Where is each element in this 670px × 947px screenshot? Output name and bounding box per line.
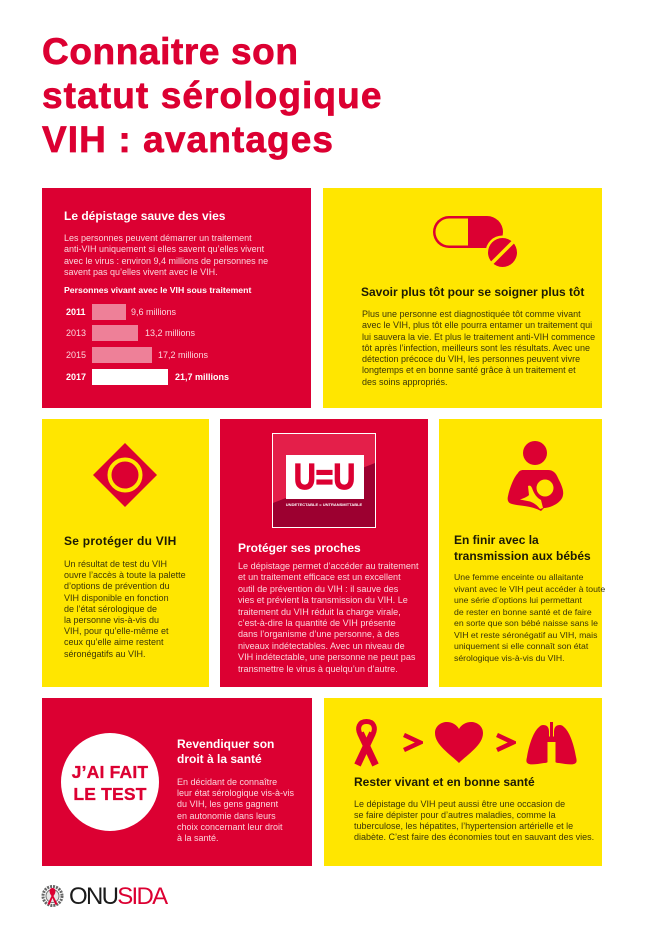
text block: avec le VIH, plus tôt elle pourra entamer un traitement qui: [362, 320, 592, 330]
heading: [454, 533, 591, 563]
text block: se faire dépister pour d’autres maladies, comme la: [354, 810, 556, 820]
icon: UN emblem with ribbon: [42, 885, 64, 907]
panel: en finir avec la transmission aux bébés: [439, 419, 602, 687]
text block: dans l’organisme d’une personne, à des: [238, 629, 399, 639]
text block: Le dépistage permet d’accéder au traitement: [238, 561, 418, 571]
heading: droit à la santé: [177, 752, 262, 766]
text block: [64, 559, 186, 659]
text block: ouvre l’accès à toute la palette: [64, 570, 186, 580]
title: [42, 31, 382, 160]
bar 2013: [66, 325, 195, 341]
title: VIH : avantages: [42, 119, 334, 160]
text block: [64, 233, 268, 277]
icon: heart: [435, 722, 483, 763]
badge: j'ai fait le test: LE TEST: [73, 784, 147, 804]
text block: sérologique vis-à-vis du VIH.: [454, 652, 565, 662]
text block: VIH disponible en fonction: [64, 593, 169, 603]
text block: la personne vis-à-vis du: [64, 615, 159, 625]
text block: tôt après l’infection, meilleurs sont les résultats. Avec une: [362, 343, 590, 353]
text block: outil de prévention du VIH : il sauve des: [238, 584, 398, 594]
heading: transmission aux bébés: [454, 549, 591, 563]
bar 2011: 9,6 millions: [131, 307, 176, 317]
text block: une série d’options lui permettant: [454, 595, 582, 605]
bar 2015: [66, 347, 208, 363]
panel: savoir plus tôt: [323, 188, 602, 408]
text block: des soins appropriés.: [362, 377, 448, 387]
bar 2013: 13,2 millions: [145, 328, 195, 338]
icon: lungs: [526, 722, 577, 764]
text block: de rester en bonne santé et de faire: [454, 606, 592, 616]
text block: Une femme enceinte ou allaitante: [454, 572, 583, 582]
text block: vies et prévient la transmission du VIH. Le: [238, 595, 408, 605]
text block: Un résultat de test du VIH: [64, 559, 167, 569]
text block: détection précoce du VIH, les personnes peuvent vivre: [362, 354, 580, 364]
arrow: greater than: [496, 733, 516, 752]
icon: U=U badge: [272, 433, 376, 528]
title: statut sérologique: [42, 75, 382, 116]
text block: VIH indétectable, une personne ne peut pas: [238, 652, 415, 662]
text block: Le dépistage du VIH peut aussi être une occasion de: [354, 799, 565, 809]
text block: en sorte que son bébé naisse sans le: [454, 618, 598, 628]
text block: savent pas qu’elles vivent avec le VIH.: [64, 267, 218, 277]
text block: ceux qu’elle aime restent: [64, 637, 164, 647]
text block: choix concernant leur droit: [177, 822, 283, 832]
text block: anti-VIH uniquement si elles savent qu’elles vivent: [64, 244, 264, 254]
bar 2015: 2015: [66, 350, 86, 360]
bar 2011: [66, 304, 176, 320]
bar 2017: 21,7 millions: [175, 372, 229, 382]
text block: en autonomie dans leurs: [177, 811, 276, 821]
panel: revendiquer son droit à la santé: [42, 698, 312, 866]
wordmark: ONUSIDA: [69, 883, 166, 910]
panel: le dépistage sauve des vies: [42, 188, 311, 408]
text block: [362, 309, 595, 387]
badge: j'ai fait le test: J’AI FAIT: [72, 762, 148, 782]
bar chart: [66, 304, 229, 385]
bar 2017: [66, 369, 229, 385]
text block: uniquement si elle connaît son état: [454, 641, 588, 651]
bar 2015: 17,2 millions: [158, 350, 208, 360]
heading: [177, 737, 274, 766]
text block: niveaux indétectables. Avec un niveau de: [238, 641, 405, 651]
text block: [238, 561, 418, 674]
text block: VIH, pour qu’elle-même et: [64, 626, 169, 636]
text block: [354, 799, 594, 842]
heading: Rester vivant et en bonne santé: [354, 775, 535, 789]
text block: tuberculose, les hépatites, l’hypertension artérielle et le: [354, 821, 573, 831]
text block: En décidant de connaître: [177, 777, 277, 787]
text block: de l’état sérologique de: [64, 604, 157, 614]
text block: du VIH, les gens gagnent: [177, 799, 278, 809]
panel: se protéger du VIH: [42, 419, 209, 687]
text block: vivant avec le VIH peut accéder à toute: [454, 584, 605, 594]
text block: [177, 777, 294, 843]
text block: à la santé.: [177, 833, 219, 843]
text block: Plus une personne est diagnostiquée tôt comme vivant: [362, 309, 581, 319]
text block: avec le virus : environ 9,4 millions de personnes ne: [64, 256, 268, 266]
heading: Revendiquer son: [177, 737, 274, 751]
heading: Se protéger du VIH: [64, 534, 177, 548]
bar 2013: 2013: [66, 328, 86, 338]
text block: lui sauvera la vie. Et plus le traitement anti-VIH commence: [362, 332, 595, 342]
text block: traitement du VIH réduit la charge virale,: [238, 607, 401, 617]
arrow: greater than: [403, 733, 423, 752]
text block: transmettre le virus à quelqu’un d’autre.: [238, 664, 398, 674]
text block: d’options de prévention du: [64, 581, 170, 591]
U=U white box: U=U: [294, 456, 356, 497]
heading: En finir avec la: [454, 533, 539, 547]
text block: longtemps et en bonne santé grâce à un traitement et: [362, 365, 576, 375]
heading: Protéger ses proches: [238, 541, 361, 555]
text block: VIH et reste séronégatif au VIH, mais: [454, 630, 597, 640]
text block: leur état sérologique vis-à-vis: [177, 788, 294, 798]
title: Connaitre son: [42, 31, 299, 72]
bar 2011: 2011: [66, 307, 86, 317]
badge: j'ai fait le test: [61, 733, 159, 831]
heading: Savoir plus tôt pour se soigner plus tôt: [361, 285, 584, 299]
text block: Les personnes peuvent démarrer un traitement: [64, 233, 252, 243]
icon: red ribbon: [354, 719, 379, 766]
panel: rester vivant et en bonne santé: [324, 698, 602, 866]
icon: capsule and tablet: [433, 216, 517, 267]
text block: séronégatifs au VIH.: [64, 649, 146, 659]
icon: diamond with ring: [93, 443, 157, 507]
bar 2017: 2017: [66, 372, 86, 382]
panel: protéger ses proches: [220, 419, 428, 687]
logo: ONUSIDA: [42, 883, 168, 910]
text block: et un traitement efficace est un excellent: [238, 572, 401, 582]
text block: [454, 572, 605, 662]
chart title: Personnes vivant avec le VIH sous traitement: [64, 285, 251, 295]
text block: c’est-à-dire la quantité de VIH présente: [238, 618, 396, 628]
heading: Le dépistage sauve des vies: [64, 209, 225, 223]
badge caption: UNDETECTABLE = UNTRANSMITTABLE: [286, 502, 362, 507]
icon: breastfeeding mother: [508, 441, 564, 511]
text block: diabète. C’est faire des économies tout en sauvant des vies.: [354, 832, 594, 842]
